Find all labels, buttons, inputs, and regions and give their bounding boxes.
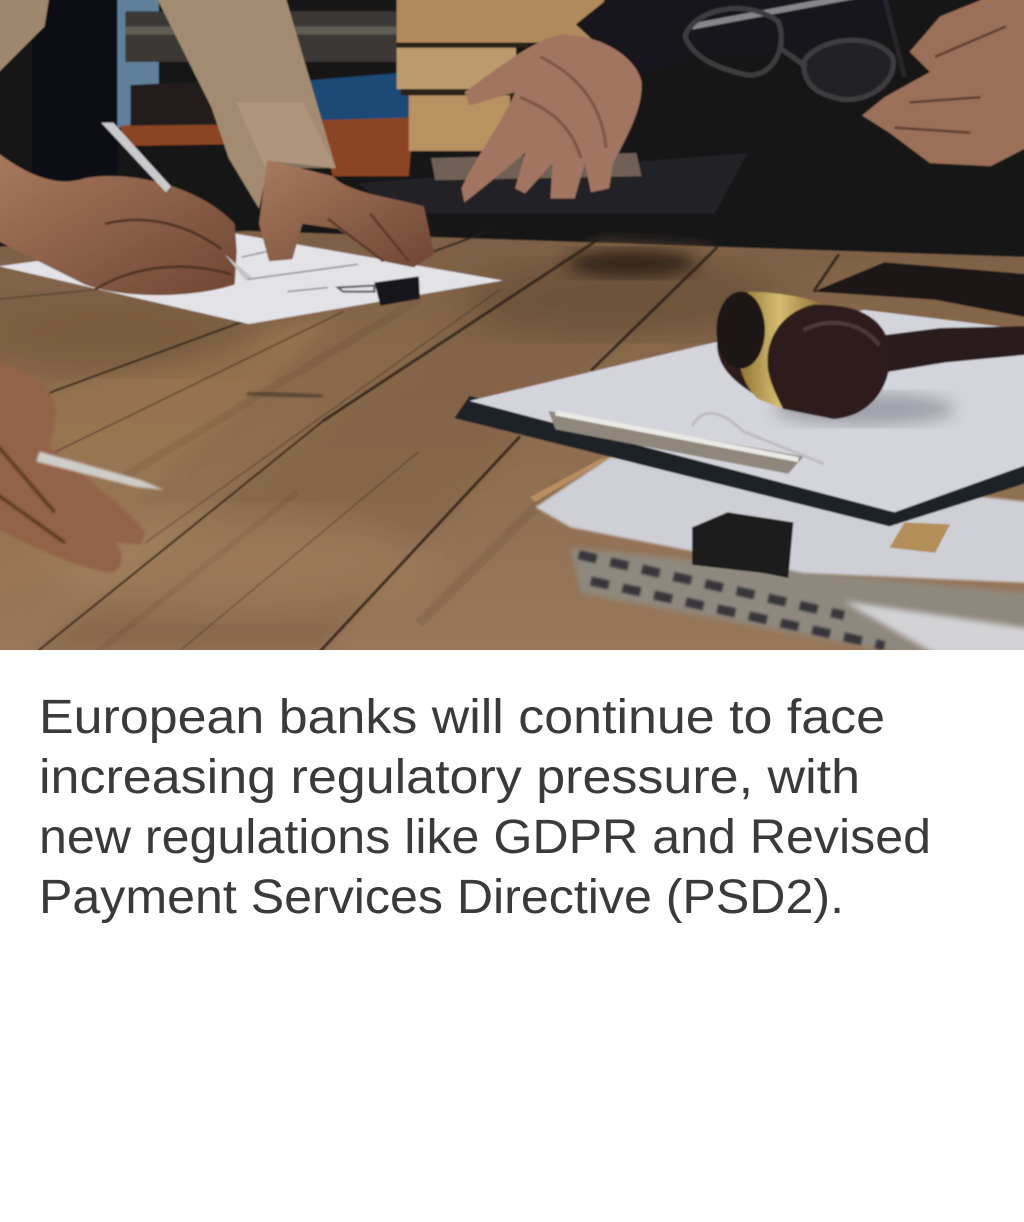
caption text: increasing regulatory pressure, with xyxy=(39,751,860,804)
dark suit sleeve xyxy=(576,0,884,128)
open hand gesture xyxy=(461,35,642,203)
clipboard stack xyxy=(454,310,1024,654)
binders and book stack xyxy=(120,0,642,180)
left foreground hand with pen xyxy=(0,362,164,573)
caption text: Payment Services Directive (PSD2). xyxy=(39,871,844,924)
hand holding glasses xyxy=(862,0,1024,166)
eyeglasses xyxy=(685,0,905,100)
dark tablet xyxy=(814,262,1024,318)
caption text xyxy=(39,691,931,924)
left sleeve and right hand with pen xyxy=(0,0,434,295)
caption text: new regulations like GDPR and Revised xyxy=(39,811,931,864)
gavel xyxy=(716,292,1024,425)
dark background xyxy=(0,0,1024,259)
caption text: European banks will continue to face xyxy=(39,691,885,744)
table surface xyxy=(0,231,1024,654)
photo: hands at wooden table with documents and gavel xyxy=(0,0,1024,650)
paper with binder clip xyxy=(0,234,503,324)
